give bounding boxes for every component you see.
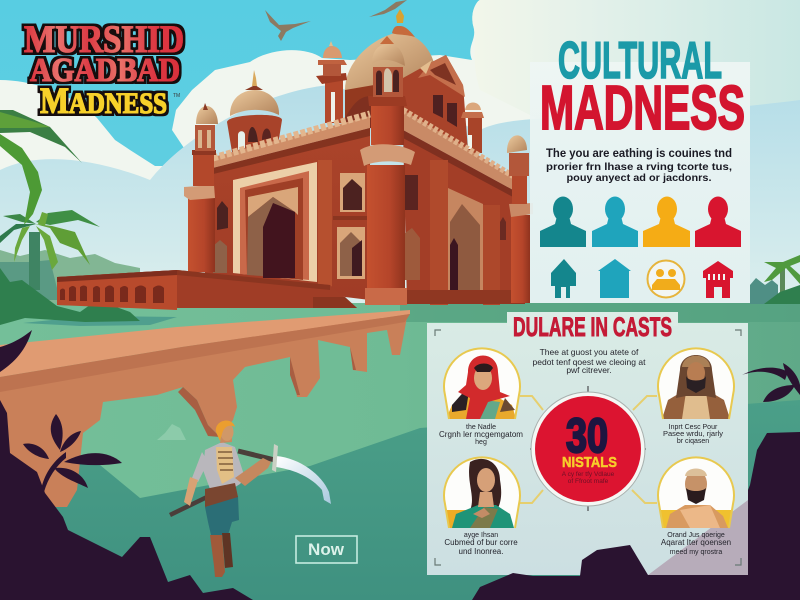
- stone bridge: [0, 310, 410, 507]
- caption: upper right: Inprt Cesc Pour: [669, 424, 718, 431]
- panel: cultural madness: [530, 32, 750, 303]
- portrait: woman in red scarf: [444, 348, 520, 419]
- right facade wall: [403, 110, 530, 305]
- caption: lower left: ayge Ihsan: [464, 532, 498, 539]
- terrace wall: [57, 270, 357, 310]
- caption: lower right: Aqarat Iter qoensen: [661, 538, 731, 547]
- intro text: pedot tenf qoest we cleoing at: [533, 357, 646, 367]
- portrait: woman in green sari: [444, 457, 520, 528]
- stat label: NISTALS: [562, 454, 617, 471]
- intro text: pwf citrever.: [566, 365, 612, 375]
- main arch gate: [233, 162, 317, 282]
- description text: pouy anyect ad or jacdonrs.: [566, 172, 712, 184]
- legs and boots: [205, 496, 239, 577]
- description text: The you are eathing is couines tnd: [546, 148, 732, 160]
- ground: [0, 303, 800, 600]
- background trees left: [0, 250, 140, 315]
- minaret rear left: [316, 41, 347, 123]
- stat caption: A cy fer tfy Vdlaue: [562, 471, 615, 478]
- foreground silhouettes: [0, 330, 800, 600]
- panel: dulare in casts: [427, 312, 748, 575]
- intro text: Thee at guost you atete of: [540, 347, 639, 357]
- description text: [546, 148, 732, 184]
- caption: upper left: heg: [475, 439, 487, 446]
- caption: upper right: [663, 424, 723, 445]
- trademark mark: TM: [173, 93, 180, 99]
- stat caption: [562, 471, 615, 485]
- caption: lower right: [661, 532, 731, 556]
- left tower: [184, 103, 218, 272]
- caption: upper left: the Nadle: [466, 424, 496, 431]
- central dome: [345, 9, 437, 90]
- left facade wall: [205, 114, 370, 300]
- head: [216, 421, 235, 443]
- central stat circle: [530, 386, 646, 511]
- icon: left plant: [23, 414, 122, 492]
- sky background: [0, 0, 800, 320]
- button: now: [296, 536, 357, 563]
- swordsman character: [170, 421, 331, 577]
- right palm and bushes: [750, 255, 800, 304]
- caption: upper left: [439, 424, 523, 446]
- heading: DULARE IN CASTS: [513, 312, 672, 342]
- silhouette: bottom centre and right: [472, 432, 800, 600]
- palm trees left: [0, 110, 140, 325]
- caption: upper left: Crgnh ler mcgemgatom: [439, 430, 523, 439]
- caption: lower left: [444, 532, 518, 556]
- icon: people row: [540, 196, 741, 247]
- back tower right: [461, 102, 484, 153]
- caption: lower left: Cubmed of bur corre: [444, 538, 518, 547]
- caption: lower left: und Inonrea.: [459, 547, 503, 556]
- facade windows: [213, 173, 370, 279]
- icon: upper left leaf: [0, 330, 32, 372]
- caption: upper right: br ciqasen: [677, 438, 709, 445]
- logo title: MURSHID: [24, 18, 184, 61]
- icon: right plant: [742, 363, 800, 402]
- connector lines: [520, 396, 657, 503]
- caption: upper right: Pasee wrdu, rjarly: [663, 429, 723, 438]
- button: now: Now: [308, 540, 345, 559]
- corner marks: [435, 330, 741, 565]
- caption: lower right: Orand Jus qoerige: [667, 532, 725, 539]
- stat caption: of Ffroot mafe: [568, 478, 609, 485]
- mosque building: [57, 9, 533, 310]
- portrait: monk in orange robe: [658, 457, 734, 528]
- description text: prorier frn lhase a rving tcorte tus,: [546, 161, 732, 173]
- left dome pavilion: [227, 70, 282, 152]
- intro text: [533, 347, 646, 375]
- logo title: AGADBAD: [30, 52, 180, 89]
- icon: birds: [265, 0, 407, 41]
- rifle and blade: [170, 444, 331, 515]
- silhouette: left hill: [0, 400, 253, 600]
- icon: houses and temple row: [551, 259, 733, 298]
- right tower: [507, 135, 533, 303]
- logo title: [24, 18, 184, 122]
- logo title: MADNESS: [40, 81, 167, 122]
- stat number: 30: [566, 410, 608, 463]
- torso: [184, 442, 271, 507]
- rear upper block: [345, 55, 468, 150]
- portrait: bearded man in coat: [658, 348, 734, 419]
- corner tower: [360, 36, 415, 305]
- caption: lower right: meed my qrostra: [670, 549, 722, 556]
